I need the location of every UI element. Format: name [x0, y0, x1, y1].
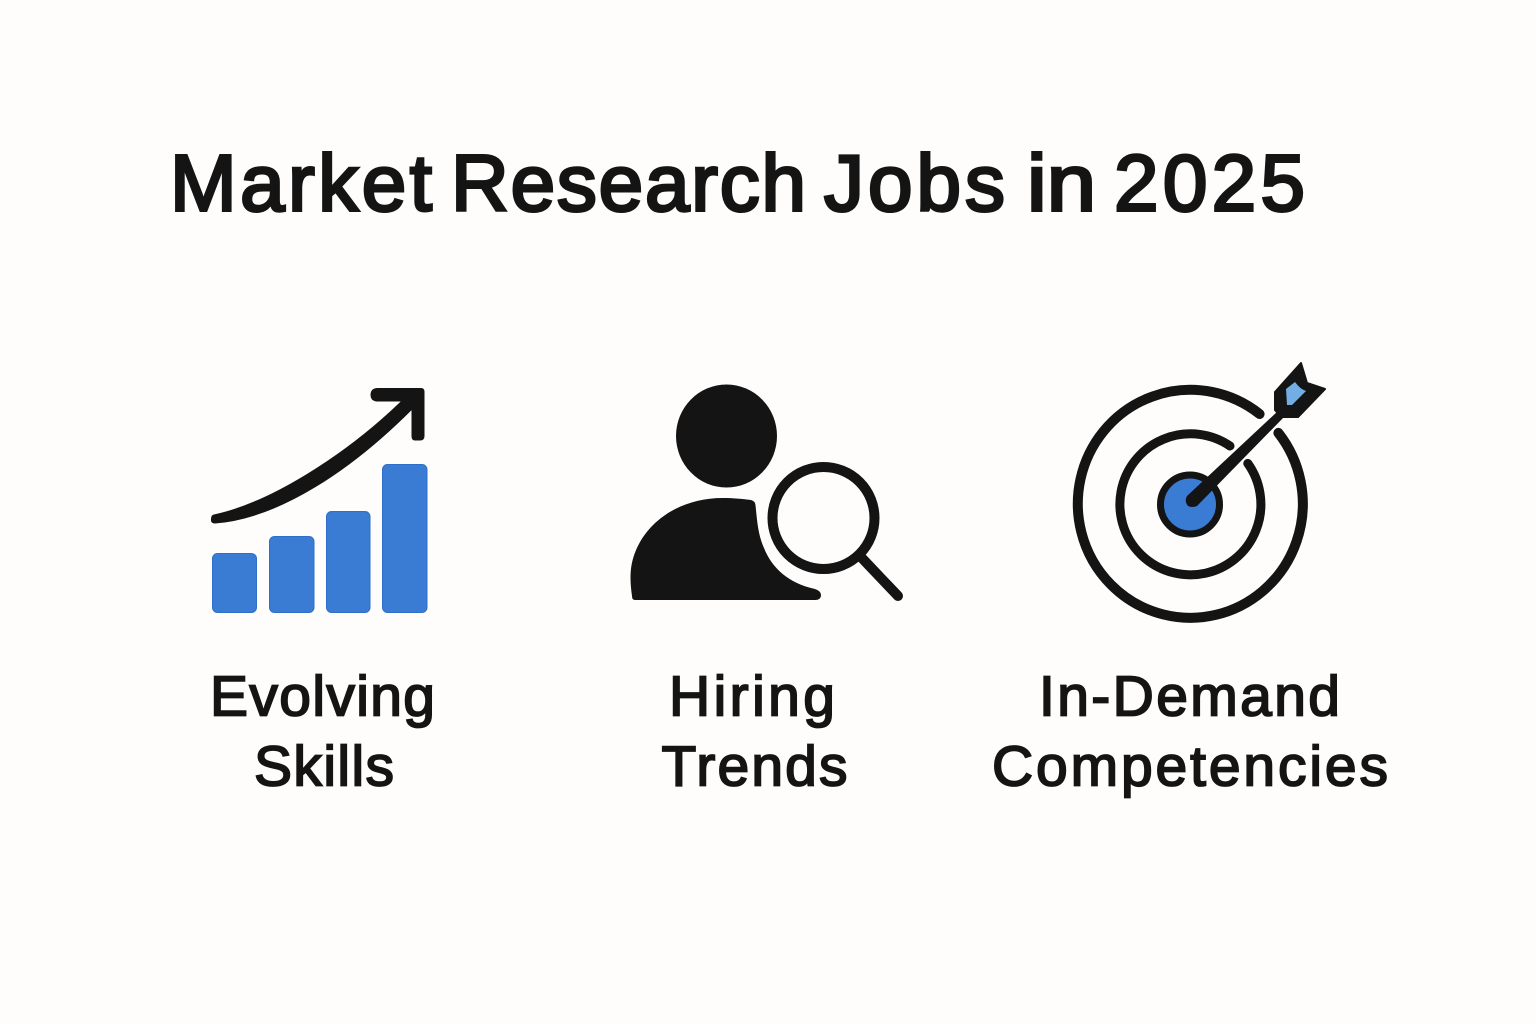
magnifying glass [772, 467, 898, 596]
panel: evolving skills [210, 388, 435, 798]
panel: in-demand competencies [992, 363, 1388, 798]
target outer ring [1078, 390, 1303, 618]
title: 2025 [1114, 138, 1305, 228]
label: Evolving Skills [210, 664, 435, 798]
label: In-Demand Competencies: In-Demand [1039, 664, 1340, 728]
target middle ring [1120, 434, 1261, 575]
label: Hiring Trends [662, 664, 848, 798]
label: In-Demand Competencies: Competencies [992, 734, 1388, 798]
arrow fletching highlight [1286, 382, 1306, 405]
label: Evolving Skills: Skills [254, 734, 394, 798]
title: Market [170, 138, 432, 228]
icon: target with arrow [1078, 363, 1325, 618]
title: in [1027, 138, 1096, 228]
label: Evolving Skills: Evolving [210, 664, 435, 728]
label: Hiring Trends: Trends [662, 734, 848, 798]
icon: rising bar chart [211, 388, 427, 612]
person head [676, 384, 777, 488]
panel: hiring trends [631, 384, 898, 798]
title [170, 138, 1305, 228]
arrow fletching [1275, 363, 1325, 417]
label: In-Demand Competencies [992, 664, 1388, 798]
arrow shaft [1186, 411, 1284, 507]
label: Hiring Trends: Hiring [669, 664, 835, 728]
person body [631, 498, 821, 600]
title: Jobs [824, 138, 1005, 228]
bar chart [212, 464, 427, 612]
arrow: upward trend [211, 388, 424, 523]
title: Research [451, 138, 806, 228]
icon: person with magnifying glass [631, 384, 898, 600]
target bullseye [1160, 475, 1220, 534]
